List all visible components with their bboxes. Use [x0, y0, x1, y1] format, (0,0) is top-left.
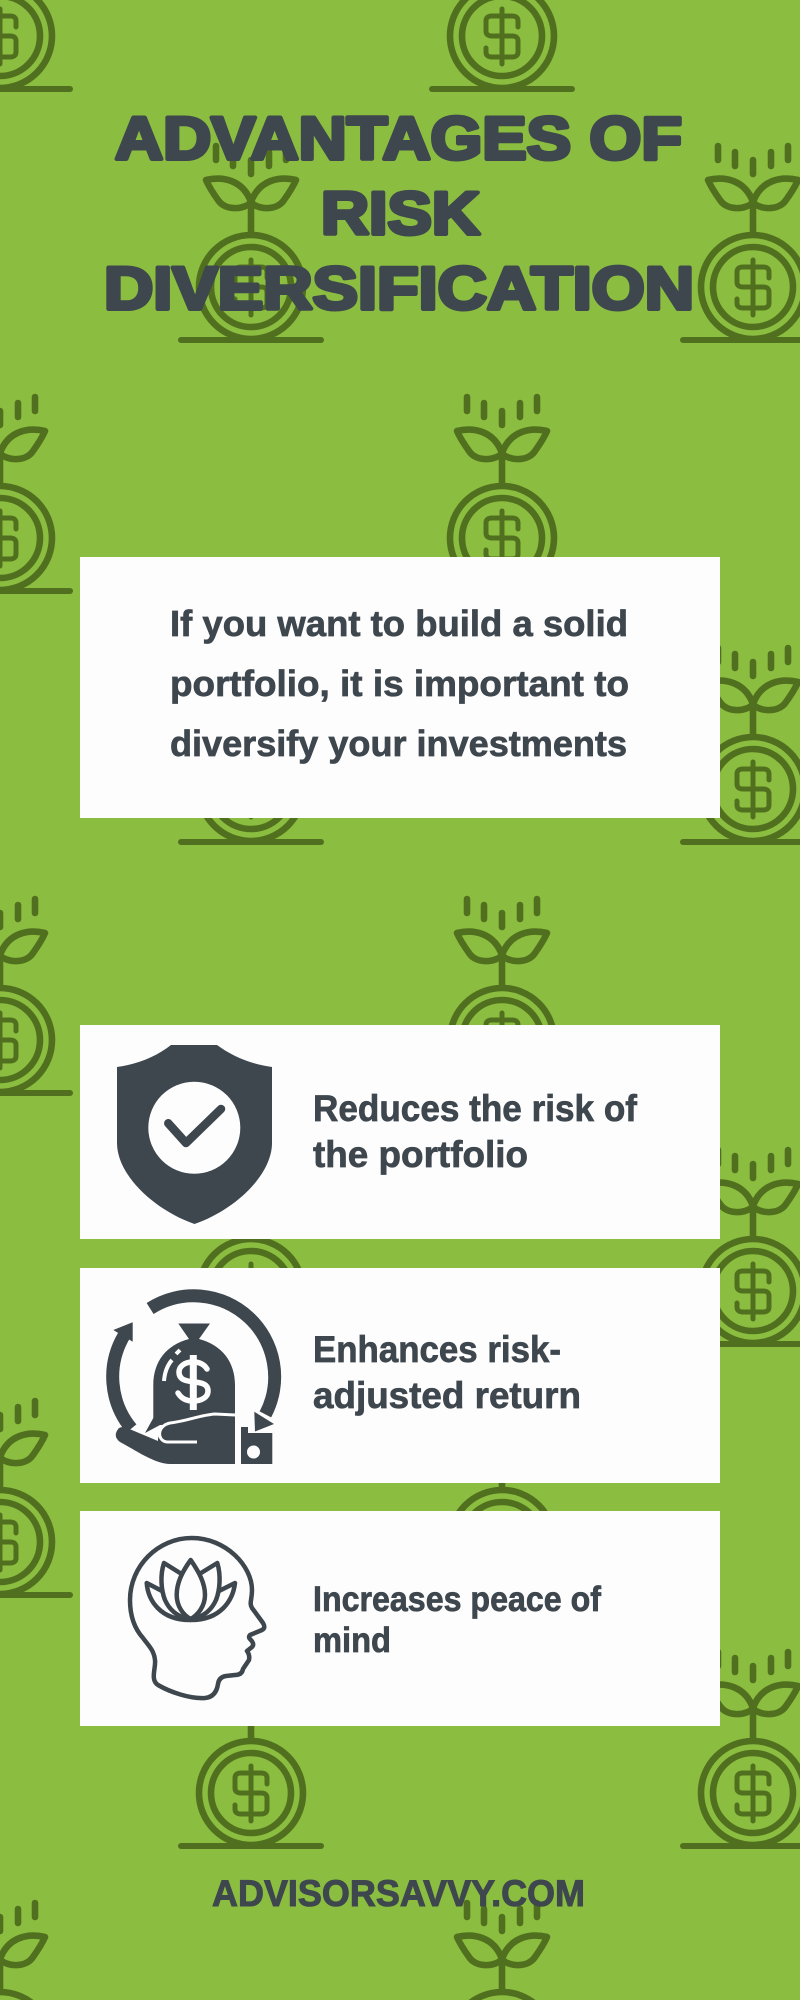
text: enhances risk-adjusted return: Enhances risk-: [313, 1329, 561, 1370]
title: DIVERSIFICATION: [104, 255, 694, 322]
icon: shield with check mark: [117, 1045, 272, 1224]
panel: peace of mind: [80, 1511, 720, 1726]
text: enhances risk-adjusted return: [313, 1329, 581, 1416]
text: reduces the risk of the portfolio: the portfolio: [313, 1134, 528, 1175]
icon: head with lotus flower: [130, 1538, 264, 1698]
text: increases peace of mind: [313, 1580, 601, 1660]
intro text: [170, 603, 629, 764]
title: RISK: [321, 180, 480, 247]
intro text: If you want to build a solid: [170, 603, 628, 644]
text: increases peace of mind: Increases peace of: [313, 1580, 601, 1619]
title: [104, 105, 694, 322]
text: reduces the risk of the portfolio: [313, 1088, 638, 1175]
icon: money bag in hand with circular arrows: [113, 1296, 275, 1464]
intro text: diversify your investments: [170, 723, 627, 764]
text: enhances risk-adjusted return: adjusted return: [313, 1375, 581, 1416]
panel: introduction: [80, 557, 720, 818]
panel: reduces risk: [80, 1025, 720, 1239]
text: reduces the risk of the portfolio: Reduces the risk of: [313, 1088, 638, 1129]
text: increases peace of mind: mind: [313, 1621, 391, 1660]
intro text: portfolio, it is important to: [170, 663, 629, 704]
footer website: ADVISORSAVVY.COM: [212, 1873, 585, 1914]
panel: enhances return: [80, 1268, 720, 1483]
title: ADVANTAGES OF: [115, 105, 682, 172]
